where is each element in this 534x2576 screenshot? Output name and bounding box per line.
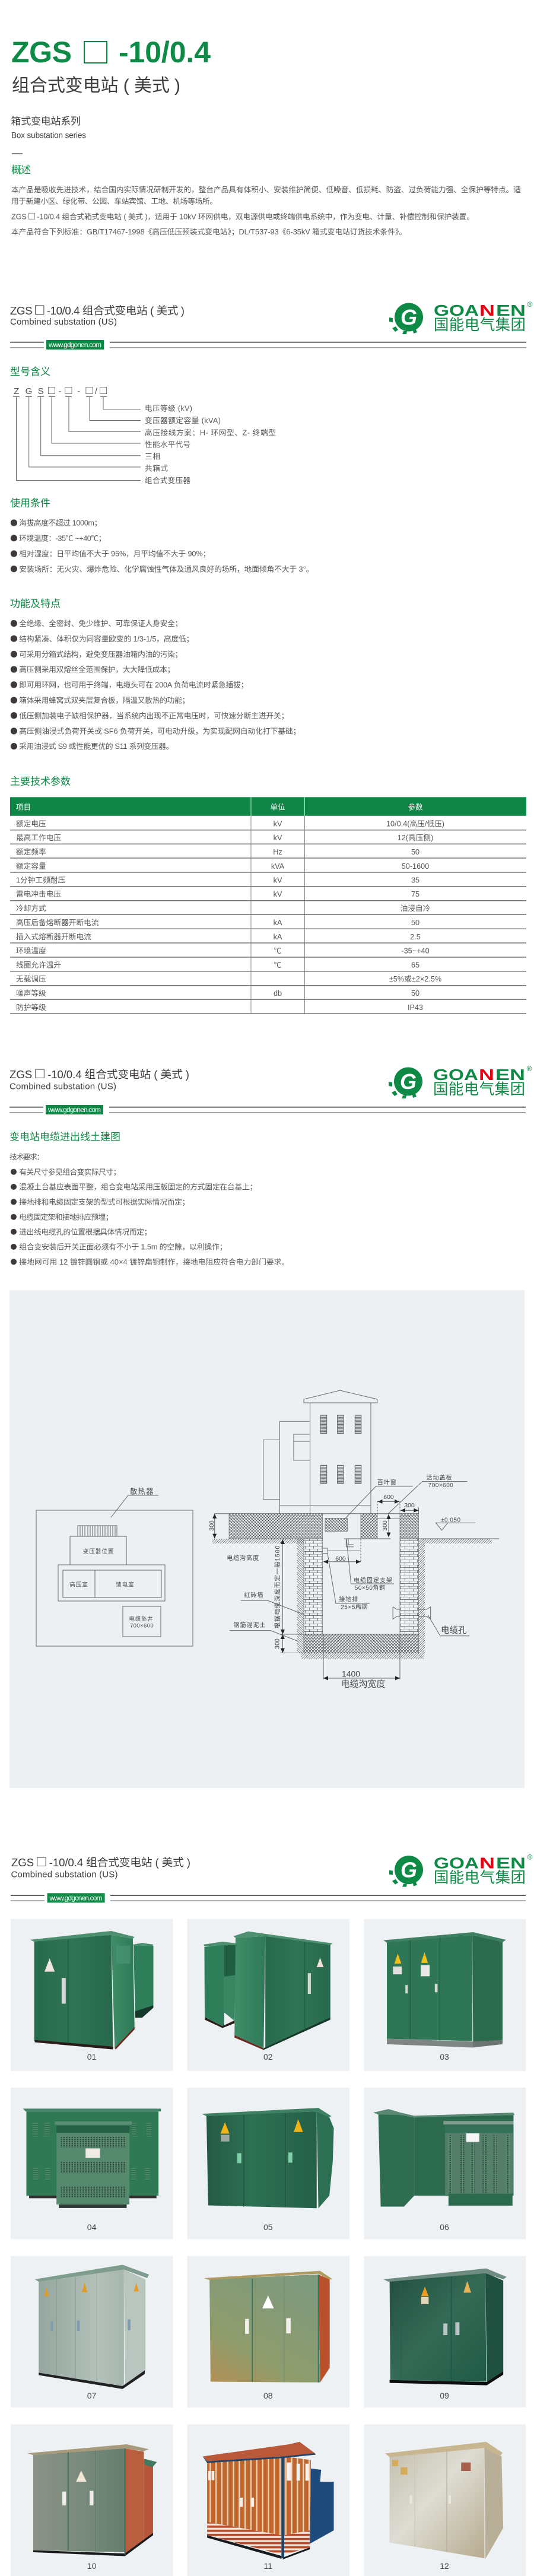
logo: GOANEN: EN — [496, 301, 526, 319]
cable bracket and earth bar — [323, 1501, 400, 1603]
dimension labels: 电缆沟高度 — [227, 1554, 259, 1562]
model code labels: 高压接线方案：H- 环网型、Z- 终端型 — [145, 428, 276, 437]
callouts: 钢筋混泥土 — [234, 1621, 266, 1629]
table first column: 1分钟工频耐压 — [16, 876, 65, 884]
logo: GOANEN: N — [479, 301, 495, 319]
parameter table — [10, 797, 526, 1014]
brick walls — [304, 1539, 418, 1634]
table unit column: kVA — [271, 862, 285, 871]
product card 01: 01 — [87, 2052, 97, 2062]
dimension labels: 300 — [404, 1502, 415, 1509]
dimension labels: 600 — [383, 1494, 394, 1501]
product card 05 — [187, 2088, 349, 2240]
overview text: 用于新建小区、绿化带、公园、车站宾馆、工地、机场等场所。 — [11, 197, 217, 205]
cabinet photo 01 — [30, 1931, 153, 2050]
model code letters: □ — [48, 384, 55, 397]
features list: 采用油浸式 S9 或性能更优的 S11 系列变压器。 — [19, 742, 173, 751]
model code letters: S — [38, 386, 44, 396]
dimension labels — [208, 1494, 415, 1689]
product card 10: 10 — [87, 2561, 97, 2571]
product card 08: 08 — [263, 2391, 273, 2400]
table header — [10, 797, 526, 816]
table unit column: kV — [274, 820, 282, 828]
table first column: 高压后备熔断器开断电流 — [16, 918, 99, 927]
table first column — [16, 820, 99, 1012]
logo: GOANEN: 国能电气集团 — [434, 317, 526, 333]
product card 12: 12 — [440, 2561, 449, 2571]
model code letters: / — [95, 386, 98, 396]
table value column: 10/0.4(高压/低压) — [386, 819, 444, 828]
features list: 高压侧油浸式负荷开关或 SF6 负荷开关，可电动升级，为实现配网自动化打下基础； — [19, 726, 300, 736]
website bar: www.gdgonen.com — [49, 1894, 102, 1902]
series name: Box substation series — [11, 131, 86, 140]
dimension labels: 根据电缆深度而定一般1500 — [274, 1546, 281, 1628]
radiator — [78, 1526, 117, 1536]
building elevation — [263, 1390, 377, 1514]
logo: GOANEN — [389, 1065, 532, 1098]
cable hole — [393, 1607, 469, 1636]
model code labels: 电压等级 (kV) — [145, 404, 192, 413]
table unit column: kV — [274, 876, 282, 884]
title — [11, 36, 211, 69]
logo: GOANEN: EN — [495, 1066, 525, 1084]
logo: GOANEN: N — [479, 1066, 494, 1084]
callouts: 活动盖板 — [426, 1474, 452, 1481]
table value column: 65 — [411, 961, 419, 970]
heading: model meaning: 型号含义 — [10, 366, 50, 377]
features list: 即可用环网，也可用于终端，电缆头可在 200A 负荷电流时紧急插拔； — [19, 680, 248, 690]
cabinet photo 02 — [204, 1932, 333, 2050]
table header: 项目 — [16, 803, 31, 812]
table first column: 额定频率 — [16, 847, 46, 856]
callouts — [230, 1474, 475, 1641]
conditions list: 环境温度：-35℃ ~+40℃； — [19, 533, 106, 543]
cable well: 700×600 — [130, 1622, 154, 1630]
table first column: 冷却方式 — [16, 904, 46, 913]
product card 02: 02 — [263, 2052, 273, 2062]
table value column: ±5%或±2×2.5% — [389, 975, 441, 983]
transformer position — [70, 1536, 126, 1565]
table first column: 无载调压 — [16, 975, 46, 983]
heading: features: 功能及特点 — [10, 598, 61, 609]
logo: GOANEN: G — [400, 1069, 417, 1094]
technical requirements: 混凝土台基应表面平整，组合变电站采用压板固定的方式固定在台基上； — [19, 1183, 257, 1192]
product card 03 — [364, 1919, 526, 2071]
dimension labels: 1400 — [342, 1669, 360, 1678]
dimension labels: 300 — [382, 1520, 389, 1531]
table first column: 线圈允许温升 — [16, 960, 61, 970]
panel: civil drawing — [9, 1290, 525, 1788]
features list: 结构紧凑、体积仅为同容量欧变的 1/3-1/5，高度低； — [19, 634, 193, 644]
logo: GOANEN — [389, 300, 533, 334]
logo: GOANEN: ® — [527, 300, 533, 309]
header title: ZGS □ -10/0.4 组合式变电站 ( 美式 ) — [11, 1852, 190, 1870]
concrete foundation — [229, 1514, 418, 1653]
features list: 全绝缘、全密封、免少维护、可靠保证人身安全； — [19, 619, 182, 628]
product card 02 — [187, 1919, 349, 2071]
header title: ZGS □ -10/0.4 组合式变电站 ( 美式 ) — [9, 1064, 189, 1082]
logo: GOANEN: GOA — [433, 1066, 478, 1084]
model code letters: - — [77, 386, 80, 396]
radiator label — [111, 1487, 158, 1517]
table first column: 额定电压 — [16, 820, 46, 828]
website bar — [11, 1893, 526, 1902]
product card 07 — [11, 2256, 173, 2407]
logo: GOANEN: GOA — [434, 301, 479, 319]
table value column — [386, 819, 444, 1012]
heading: civil drawing: 变电站电缆进出线土建图 — [9, 1131, 120, 1143]
page header 2 — [9, 1064, 532, 1114]
overview text — [11, 185, 521, 237]
model code labels: 组合式变压器 — [145, 476, 190, 485]
cabinet photo 08 — [204, 2271, 333, 2383]
product card 01 — [11, 1919, 173, 2071]
earth hatching — [212, 1514, 499, 1659]
cabinet photo 04 — [23, 2108, 161, 2208]
table unit column: kA — [274, 919, 282, 927]
table unit column: kV — [274, 890, 282, 898]
model code labels — [145, 404, 276, 485]
logo: GOANEN — [389, 1853, 533, 1887]
cable well: 电缆坠井 — [129, 1615, 154, 1622]
cabinet photo 03 — [383, 1932, 506, 2047]
plan view — [36, 1487, 193, 1646]
page header 3 — [11, 1852, 533, 1902]
high voltage and feeder rooms: 馈电室 — [116, 1581, 135, 1588]
cabinet photo 07 — [35, 2265, 149, 2389]
dimension labels: 电缆沟宽度 — [341, 1679, 386, 1689]
model code labels: 三相 — [145, 452, 160, 460]
logo: GOANEN: G — [401, 305, 417, 329]
table value column: 35 — [411, 876, 419, 884]
dimension labels: 600 — [335, 1555, 346, 1562]
callouts: 700×600 — [428, 1482, 453, 1489]
table value column: 12(高压侧) — [398, 833, 433, 842]
product card 03: 03 — [440, 2052, 449, 2062]
table header: 单位 — [270, 803, 285, 812]
logo: GOANEN: 国能电气集团 — [434, 1870, 526, 1886]
website bar — [9, 1105, 526, 1114]
table first column: 最高工作电压 — [16, 833, 61, 842]
website bar — [10, 340, 526, 350]
features list: 低压侧加装电子缺相保护器，当系统内出现不正常电压时，可快速分断主进开关； — [19, 712, 288, 720]
table unit column: ℃ — [274, 961, 282, 970]
product card 06: 06 — [440, 2222, 449, 2232]
transformer position: 变压器位置 — [83, 1548, 114, 1555]
header english title: Combined substation (US) — [10, 317, 117, 327]
features list: 可采用分箱式结构，避免变压器油箱内油的污染； — [19, 650, 182, 659]
series name — [11, 116, 86, 140]
table value column: 50-1600 — [402, 862, 429, 871]
conditions list: 海拔高度不超过 1000m； — [19, 519, 101, 528]
model code letters: - — [58, 386, 62, 396]
product card 04: 04 — [87, 2222, 97, 2232]
product card 11: 11 — [264, 2561, 272, 2571]
technical requirements: 进出线电缆孔的位置根据具体情况而定； — [19, 1227, 151, 1237]
conditions list — [11, 519, 313, 573]
table unit column: kA — [274, 933, 282, 941]
cabinet photo 10 — [27, 2444, 157, 2556]
series name: 箱式变电站系列 — [11, 116, 81, 127]
logo: GOANEN: ® — [527, 1065, 532, 1073]
subtitle: 组合式变电站 ( 美式 ) — [12, 76, 180, 96]
cabinet photo 12 — [385, 2442, 503, 2559]
website bar: www.gdgonen.com — [47, 1106, 101, 1114]
page header 1 — [10, 300, 533, 350]
features list: 箱体采用蜂窝式双夹层复合板，隔温又散热的功能； — [19, 696, 189, 706]
model code labels: 共箱式 — [145, 464, 168, 472]
product card 05: 05 — [263, 2222, 273, 2232]
product card 09: 09 — [440, 2391, 449, 2400]
header english title: Combined substation (US) — [9, 1081, 116, 1092]
model code diagram — [13, 384, 276, 485]
cabinet photo 11 — [203, 2442, 334, 2559]
conditions list: 安装场所：无火灾、爆炸危险、化学腐蚀性气体及通风良好的场所，地面倾角不大于 3°。 — [19, 564, 313, 573]
callouts: 电缆固定支架 — [354, 1576, 393, 1584]
technical requirements: 有关尺寸参见组合变实际尺寸； — [19, 1167, 120, 1177]
table unit column: kV — [274, 834, 282, 842]
callouts: ±0.050 — [441, 1517, 461, 1524]
cable hole: 电缆孔 — [441, 1625, 467, 1635]
table value column: 75 — [411, 890, 419, 898]
heading: overview: 概述 — [11, 164, 31, 176]
website bar: www.gdgonen.com — [48, 341, 101, 349]
callouts: 接地排 — [339, 1595, 358, 1603]
dimension labels: 300 — [274, 1638, 281, 1649]
title: ZGS — [11, 36, 72, 69]
technical requirements — [9, 1153, 289, 1266]
table first column: 防护等级 — [16, 1003, 46, 1012]
divider dash — [12, 153, 23, 154]
technical requirements: 电缆固定架和接地排应预埋； — [19, 1212, 113, 1222]
logo: GOANEN: ® — [527, 1853, 533, 1862]
overview text: ZGS □ -10/0.4 组合式箱式变电站 ( 美式 )，适用于 10kV 环网供电，双电源供电或终端供电系统中，作为变电、计量、补偿控制和保护装置。 — [11, 210, 474, 222]
model code labels: 变压器额定容量 (kVA) — [145, 416, 221, 425]
section view — [208, 1390, 499, 1689]
callouts: 25×5扁钢 — [341, 1603, 368, 1611]
heading: technical parameters: 主要技术参数 — [10, 776, 71, 787]
logo: GOANEN: G — [401, 1858, 417, 1882]
product card 04 — [11, 2088, 173, 2240]
table unit column: db — [274, 989, 282, 998]
logo: GOANEN: 国能电气集团 — [433, 1081, 525, 1098]
technical requirements: 组合变安装后开关正面必须有不小于 1.5m 的空隙，以利操作； — [19, 1243, 227, 1252]
product card 08 — [187, 2256, 349, 2407]
cabinet photo 06 — [373, 2109, 514, 2206]
features list — [11, 619, 300, 751]
product card 12 — [364, 2425, 526, 2576]
table value column: 2.5 — [410, 933, 421, 941]
model code letters: G — [26, 386, 32, 396]
table value column: 50 — [411, 919, 419, 927]
product card 09 — [364, 2256, 526, 2407]
cable well — [123, 1606, 161, 1637]
table unit column: ℃ — [274, 947, 282, 955]
cabinet photo 09 — [383, 2269, 507, 2386]
model code letters — [14, 384, 107, 397]
table header: 参数 — [408, 803, 423, 812]
table value column: 油浸自冷 — [401, 904, 431, 913]
title: -10/0.4 — [119, 36, 211, 69]
table first column: 插入式熔断器开断电流 — [16, 933, 91, 941]
table unit column: Hz — [273, 848, 282, 856]
table unit column — [271, 820, 285, 998]
technical requirements: 技术要求： — [9, 1153, 44, 1161]
model code letters: Z — [14, 386, 19, 396]
header title: ZGS □ -10/0.4 组合式变电站 ( 美式 ) — [10, 300, 185, 318]
model code letters: □ — [65, 384, 72, 397]
dimension lines — [212, 1500, 418, 1681]
callouts: 百叶窗 — [377, 1479, 397, 1486]
product card 11 — [187, 2425, 349, 2576]
table first column: 环境温度 — [16, 946, 46, 955]
table first column: 额定容量 — [16, 862, 46, 871]
header english title: Combined substation (US) — [11, 1869, 117, 1880]
overview text: 本产品符合下列标准：GB/T17467-1998《高压低压预装式变电站》；DL/T537-93《6-35kV 箱式变电站订货技术条件》。 — [11, 227, 406, 237]
technical requirements: 接地排和电缆固定支架的型式可根据实际情况而定； — [19, 1198, 189, 1207]
overview text: 本产品是吸收先进技术，结合国内实际情况研制开发的，整台产品具有体积小、安装维护简便、低噪音、低损耗、防盗、过负荷能力强、全保护等特点。适 — [11, 185, 521, 194]
dimension labels: 300 — [208, 1520, 215, 1531]
product card 07: 07 — [87, 2391, 97, 2400]
logo: GOANEN: EN — [496, 1854, 526, 1872]
table value column: 50 — [411, 848, 419, 856]
callouts: 红砖墙 — [244, 1592, 263, 1599]
logo: GOANEN: GOA — [434, 1854, 479, 1872]
model code letters: □ — [100, 384, 107, 397]
table value column: -35~+40 — [401, 947, 430, 955]
high voltage and feeder rooms: 高压室 — [69, 1581, 88, 1588]
table first column: 噪声等级 — [16, 989, 46, 998]
conditions list: 相对湿度：日平均值不大于 95%，月平均值不大于 90%； — [19, 549, 210, 559]
logo: GOANEN: N — [479, 1854, 495, 1872]
callouts: 50×50角钢 — [355, 1584, 385, 1592]
table value column: IP43 — [408, 1003, 423, 1012]
model code letters: □ — [86, 384, 93, 397]
table value column: 50 — [411, 989, 419, 998]
product card 10 — [11, 2425, 173, 2576]
features list: 高压侧采用双熔丝全范围保护，大大降低成本； — [19, 665, 174, 675]
product card 06 — [364, 2088, 526, 2240]
table first column: 雷电冲击电压 — [16, 890, 61, 898]
technical requirements: 接地网可用 12 镀锌圆钢或 40×4 镀锌扁铜制作，接地电阻应符合电力部门要求。 — [19, 1257, 289, 1266]
cabinet photo 05 — [202, 2108, 334, 2208]
model code labels: 性能水平代号 — [145, 440, 190, 449]
radiator label: 散热器 — [130, 1487, 154, 1495]
high voltage and feeder rooms — [63, 1570, 161, 1597]
heading: conditions: 使用条件 — [10, 497, 50, 509]
